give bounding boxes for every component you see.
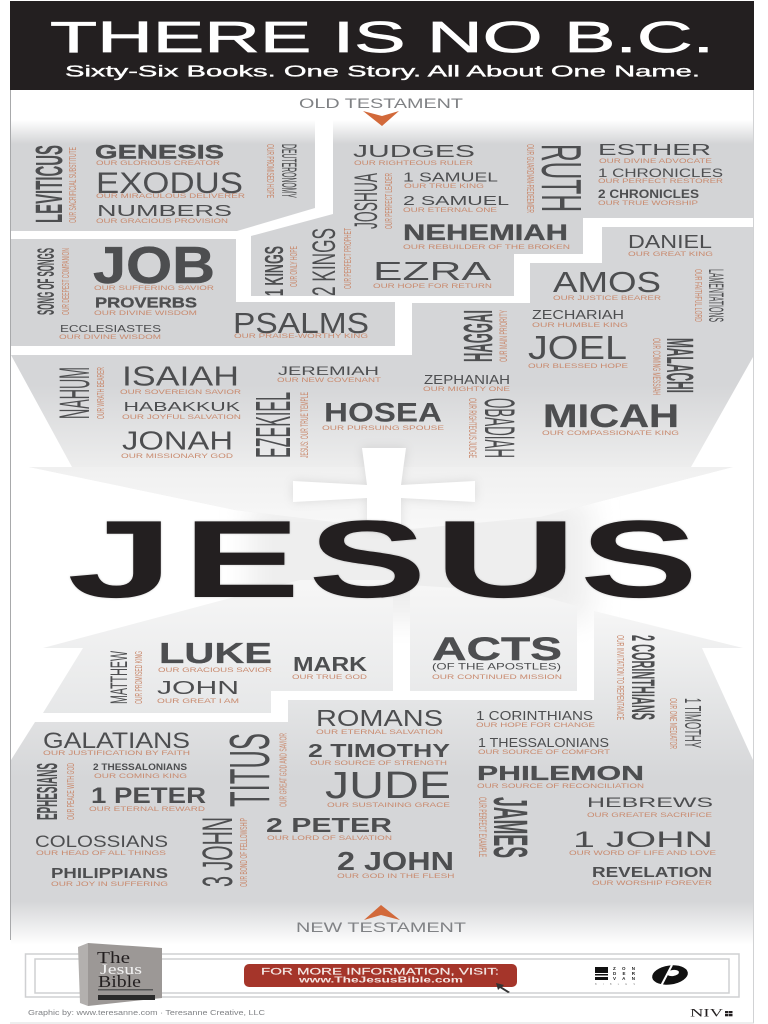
book: Revelation: REVELATION	[592, 864, 712, 881]
new testament books: epistles left: 3 JOHN	[194, 817, 242, 887]
old testament books: history: RUTH	[529, 144, 593, 212]
book: James	[476, 797, 536, 858]
book: Esther: OUR DIVINE ADVOCATE	[599, 158, 713, 165]
subtitle: Sixty-Six Books. One Story. All About One Name.	[65, 64, 700, 80]
text: LEVITICUS	[29, 145, 71, 223]
new testament books: epistles left: OUR BOND OF FELLOWSHIP	[238, 818, 250, 887]
old testament books: prophets: MALACHI	[658, 338, 700, 393]
book: Luke: LUKE	[159, 638, 272, 670]
call to action button: FOR MORE INFORMATION, VISIT:	[261, 966, 499, 978]
new testament books: epistles left: OUR GREAT GOD AND SAVIOR	[278, 733, 290, 807]
book: 2 Chronicles: OUR TRUE WORSHIP	[598, 200, 699, 207]
book: Lamentations	[692, 269, 728, 322]
book: Amos: AMOS	[553, 267, 661, 299]
old testament books: history: OUR PERFECT LEADER	[384, 173, 395, 229]
book: Proverbs	[94, 294, 197, 317]
book cover image: Jesus	[100, 962, 142, 978]
book: Genesis: GENESIS	[95, 142, 224, 164]
old testament books: history	[259, 141, 723, 296]
old testament books: history: JOSHUA	[348, 173, 384, 229]
book: 2 Chronicles	[598, 189, 699, 207]
new testament books: gospels and acts: MATTHEW	[106, 651, 133, 704]
book: Luke: OUR GRACIOUS SAVIOR	[158, 667, 272, 674]
book: Jonah	[121, 426, 233, 460]
old testament books: history: OUR PERFECT PROPHET	[342, 228, 354, 289]
book: Mark: OUR TRUE GOD	[292, 674, 367, 681]
book: Ezra: EZRA	[373, 256, 492, 286]
book: Philippians: OUR JOY IN SUFFERING	[51, 881, 168, 888]
book: 2 Peter	[266, 815, 393, 842]
book: 1 Samuel	[403, 170, 498, 190]
book: 1 Thessalonians: 1 THESSALONIANS	[478, 735, 609, 750]
book: Habakkuk: HABAKKUK	[124, 400, 241, 414]
book: Mark	[292, 654, 368, 681]
book: Jeremiah: OUR NEW COVENANT	[277, 377, 381, 384]
book: Philippians: PHILIPPIANS	[51, 866, 168, 882]
book: Numbers	[96, 203, 232, 225]
book: Ecclesiastes: ECCLESIASTES	[60, 323, 161, 335]
text: DEUTERONOMY	[277, 144, 301, 198]
central word JESUS: S	[580, 498, 698, 621]
book: John: OUR GREAT I AM	[157, 698, 239, 705]
central word JESUS: S	[308, 498, 426, 621]
book: Daniel	[628, 232, 713, 258]
book: 2 Corinthians	[614, 635, 661, 720]
old testament books: history: OUR ONLY HOPE	[289, 246, 300, 287]
book: Haggai	[455, 310, 510, 362]
book: Habakkuk	[122, 400, 241, 421]
central word JESUS: U	[434, 498, 578, 621]
book: Romans: ROMANS	[316, 705, 443, 731]
book: Isaiah	[120, 360, 241, 396]
book: 1 Corinthians: OUR HOPE FOR CHANGE	[476, 722, 596, 729]
book: Luke	[158, 638, 272, 674]
book: 2 Chronicles: 2 CHRONICLES	[598, 189, 699, 201]
book: Jude: OUR SUSTAINING GRACE	[327, 802, 451, 809]
book: 1 John: OUR WORD OF LIFE AND LOVE	[569, 850, 717, 857]
book: Exodus: EXODUS	[96, 167, 243, 200]
book: 1 Corinthians: 1 CORINTHIANS	[476, 708, 593, 723]
icon: up arrow	[364, 905, 400, 920]
book: Colossians: OUR HEAD OF ALL THINGS	[36, 850, 167, 857]
book: 1 Peter	[89, 783, 206, 813]
old testament books: prophets: OUR COMING MESSIAH	[650, 338, 662, 395]
book: Hebrews: HEBREWS	[587, 794, 713, 810]
book: 2 Kings	[306, 228, 354, 296]
book: Proverbs: OUR DIVINE WISDOM	[94, 310, 197, 317]
panel: wisdom books background	[11, 239, 395, 346]
book: Micah: OUR COMPASSIONATE KING	[542, 430, 679, 437]
central word JESUS	[67, 498, 698, 621]
book: 2 John: OUR GOD IN THE FLESH	[337, 873, 455, 880]
footer credit: Graphic by: www.teresanne.com · Teresanne Creative, LLC	[28, 1010, 265, 1017]
book: Hosea: OUR PURSUING SPOUSE	[322, 425, 445, 432]
logo: Zondervan	[595, 966, 636, 986]
central word JESUS: J	[67, 498, 174, 621]
book: Job: OUR SUFFERING SAVIOR	[94, 285, 214, 292]
book: Esther	[598, 142, 713, 165]
old testament books: prophets: HAGGAI	[455, 310, 501, 362]
book: Leviticus	[29, 145, 79, 223]
book: Genesis: OUR GLORIOUS CREATOR	[96, 160, 220, 167]
book: 2 Thessalonians: 2 THESSALONIANS	[93, 762, 187, 772]
logo: Zondervan: DER	[613, 971, 636, 976]
book: 1 Timothy	[667, 698, 706, 749]
book: Psalms: OUR PRAISE-WORTHY KING	[234, 333, 368, 340]
soft glow behind JESUS	[250, 500, 590, 620]
book: 1 Thessalonians: OUR SOURCE OF COMFORT	[478, 749, 610, 756]
book: Titus	[218, 733, 290, 807]
call to action button: www.TheJesusBible.com	[297, 974, 464, 984]
old testament books: prophets: OUR WRATH BEARER	[95, 367, 107, 419]
book: Isaiah: ISAIAH	[122, 360, 239, 392]
book: John	[157, 678, 239, 705]
old testament books: prophets: JESUS: OUR TRUE TEMPLE	[299, 392, 311, 458]
book: Joel: OUR BLESSED HOPE	[528, 363, 629, 370]
text: OUR RIGHTEOUS JUDGE	[466, 398, 478, 458]
book: Philippians	[51, 866, 168, 888]
book: Job: JOB	[93, 237, 215, 295]
book: Zechariah: ZECHARIAH	[532, 307, 624, 322]
book: Revelation	[592, 864, 712, 887]
old testament books: prophets	[51, 232, 728, 460]
icon: cursor	[496, 983, 510, 993]
panel: history and prophets background	[251, 91, 753, 296]
title: THERE IS NO B.C.	[50, 14, 714, 62]
book: Amos: OUR JUSTICE BEARER	[553, 295, 661, 302]
book: 2 John: 2 JOHN	[337, 846, 454, 876]
book: 3 John	[194, 817, 250, 887]
book: Matthew	[106, 651, 145, 704]
book: Zechariah	[532, 307, 628, 329]
book: Colossians	[35, 832, 168, 857]
book: Acts: (OF THE APOSTLES)	[432, 662, 561, 672]
book: Psalms: PSALMS	[233, 308, 369, 340]
book: Nehemiah: NEHEMIAH	[403, 220, 568, 245]
label: old testament	[299, 96, 463, 126]
old testament books: history: 1 KINGS	[259, 246, 289, 296]
new testament books: gospels and acts	[106, 631, 562, 705]
book: Numbers: NUMBERS	[97, 203, 232, 220]
book: Hebrews	[587, 794, 713, 819]
book: Micah: MICAH	[543, 398, 679, 434]
book: Zephaniah: ZEPHANIAH	[424, 372, 510, 387]
logo: NIV: NIV	[690, 1008, 724, 1020]
book: Philemon: PHILEMON	[477, 763, 644, 785]
book: 1 Corinthians	[476, 708, 596, 729]
book: John: JOHN	[157, 678, 239, 698]
book: 2 Timothy	[308, 741, 450, 767]
book: 1 John	[569, 827, 717, 857]
old testament books: prophets: LAMENTATIONS	[704, 269, 728, 322]
new testament books: epistles right: JAMES	[483, 797, 536, 858]
book: Joel: JOEL	[528, 329, 627, 366]
book: Ephesians: OUR PEACE WITH GOD	[66, 763, 77, 820]
label: old testament: OLD TESTAMENT	[299, 96, 463, 111]
new testament books: epistles left: EPHESIANS	[32, 763, 64, 820]
book: Obadiah	[466, 398, 523, 458]
book: Philemon	[477, 763, 644, 790]
old testament books: prophets: EZEKIEL	[247, 392, 301, 458]
book: Ezekiel	[247, 392, 311, 458]
panel: epistles background	[11, 611, 753, 945]
central word JESUS: E	[183, 498, 300, 621]
book: Ephesians	[32, 763, 77, 820]
book: Jeremiah: JEREMIAH	[278, 364, 379, 378]
logo: Zondervan: BIBLES	[595, 983, 635, 986]
text: SONG OF SONGS	[33, 248, 60, 315]
book: Mark: MARK	[293, 654, 368, 676]
old testament books: prophets: NAHUM	[51, 367, 99, 419]
new testament books: epistles left	[32, 705, 455, 888]
new testament books: epistles right: 2 CORINTHIANS	[625, 635, 661, 720]
cross	[293, 448, 475, 530]
logo: Zondervan: VAN	[613, 976, 635, 981]
book: Acts	[432, 631, 562, 681]
book: 1 Peter: OUR ETERNAL REWARD	[89, 806, 205, 813]
old testament books: law	[29, 142, 301, 225]
book: Ezra	[373, 256, 492, 290]
icon: down arrow	[363, 111, 399, 126]
book: 1 Thessalonians	[478, 735, 610, 756]
book: 1 Chronicles: OUR PERFECT RESTORER	[598, 178, 723, 185]
panel: gospels background	[43, 580, 393, 713]
book: Nehemiah	[403, 220, 570, 251]
book: 1 Samuel: 1 SAMUEL	[403, 170, 498, 184]
book: Nehemiah: OUR REBUILDER OF THE BROKEN	[403, 244, 570, 251]
book: 2 Peter: OUR LORD OF SALVATION	[267, 835, 392, 842]
book: 1 Chronicles	[598, 166, 723, 185]
book: Judges: OUR RIGHTEOUS RULER	[354, 160, 473, 167]
book: Jude: JUDE	[325, 765, 451, 807]
new testament books: epistles right: OUR ONE MEDIATOR	[667, 698, 679, 749]
old testament books: prophets: OUR MAIN PRIORITY	[498, 310, 510, 362]
book: Malachi	[650, 338, 700, 395]
book: 1 John: 1 JOHN	[573, 827, 713, 852]
book: Ruth	[524, 144, 593, 213]
old testament books: wisdom: OUR DEEPEST COMPANION	[61, 248, 72, 315]
book: 2 Timothy: OUR SOURCE OF STRENGTH	[310, 760, 447, 767]
new testament books: epistles right: OUR INVITATION TO REPENTANCE	[614, 635, 626, 720]
book: 1 Chronicles: 1 CHRONICLES	[598, 166, 723, 180]
old testament books: law: OUR PROMISED HOPE	[264, 144, 275, 198]
book: 1 Kings	[259, 246, 300, 296]
logo: Zondervan: ZON	[613, 966, 635, 971]
book: Hebrews: OUR GREATER SACRIFICE	[587, 812, 713, 819]
book: Daniel: OUR GREAT KING	[628, 251, 713, 258]
book: Ezra: OUR HOPE FOR RETURN	[373, 283, 492, 290]
logo: publisher mark	[651, 963, 689, 987]
book: Proverbs: PROVERBS	[95, 294, 197, 312]
book: Habakkuk: OUR JOYFUL SALVATION	[122, 414, 241, 421]
book: Judges	[353, 141, 475, 167]
book: Matthew: OUR PROMISED KING	[134, 651, 145, 704]
book: Hosea	[322, 398, 445, 432]
panel: acts background	[410, 585, 577, 691]
book: Ecclesiastes: OUR DIVINE WISDOM	[59, 334, 161, 341]
book: Revelation: OUR WORSHIP FOREVER	[592, 880, 712, 887]
book: Esther: ESTHER	[598, 142, 711, 159]
label: new testament	[296, 905, 466, 935]
book: Exodus: OUR MIRACULOUS DELIVERER	[96, 193, 245, 200]
new testament books: epistles right: 1 TIMOTHY	[680, 698, 706, 748]
book: 2 Timothy: 2 TIMOTHY	[308, 741, 450, 761]
book: Ecclesiastes	[59, 323, 161, 341]
new testament books: epistles right	[476, 635, 717, 887]
book: Romans	[316, 705, 443, 736]
new testament books: epistles left: TITUS	[218, 733, 282, 807]
book: 2 Thessalonians: OUR COMING KING	[94, 773, 187, 780]
book: Zephaniah	[423, 372, 511, 393]
book: Galatians: OUR JUSTIFICATION BY FAITH	[43, 750, 190, 757]
book: Deuteronomy	[264, 144, 301, 198]
book: 2 Samuel	[403, 193, 509, 214]
book: Ruth: OUR GUARDIAN-REDEEMER	[524, 144, 535, 213]
old testament books: wisdom	[33, 237, 369, 341]
book: Jeremiah	[277, 364, 381, 384]
book: Galatians: GALATIANS	[43, 728, 190, 753]
book: Nahum	[51, 367, 107, 419]
book: Joshua	[348, 173, 395, 229]
book: Jonah: JONAH	[122, 426, 233, 456]
book: Zechariah: OUR HUMBLE KING	[532, 322, 628, 329]
book: 2 Samuel: OUR ETERNAL ONE	[403, 207, 498, 214]
book cover image: Bible	[98, 972, 141, 991]
logo: NIV	[690, 1008, 732, 1020]
book: 2 Peter: 2 PETER	[266, 815, 393, 837]
panel: prophets background	[11, 227, 753, 530]
book: 2 Kings: 2 KINGS	[306, 228, 342, 296]
book cover image: The	[97, 948, 130, 967]
book: 1 Peter: 1 PETER	[91, 783, 206, 808]
header banner	[10, 1, 754, 90]
book: Philemon: OUR SOURCE OF RECONCILIATION	[477, 783, 644, 790]
call to action button	[244, 964, 517, 987]
panel: law books background	[11, 91, 315, 231]
book: Leviticus: OUR SACRIFICIAL SUBSTITUTE	[68, 147, 79, 223]
book: Jonah: OUR MISSIONARY GOD	[121, 453, 233, 460]
book: Lamentations: OUR FAITHFUL LORD	[692, 269, 703, 322]
book: Acts: OUR CONTINUED MISSION	[432, 674, 562, 681]
new testament books: epistles right: OUR PERFECT EXAMPLE	[476, 797, 488, 857]
book: Song of Songs	[33, 248, 72, 315]
light rays behind cross	[29, 467, 733, 530]
book: Romans: OUR ETERNAL SALVATION	[316, 729, 443, 736]
footer frame	[26, 954, 739, 997]
book: Zephaniah: OUR MIGHTY ONE	[423, 386, 511, 393]
book: Genesis	[95, 142, 224, 167]
book: Hosea: HOSEA	[324, 398, 442, 428]
book: Colossians: COLOSSIANS	[35, 832, 168, 851]
book: Daniel: DANIEL	[628, 232, 712, 252]
book: Numbers: OUR GRACIOUS PROVISION	[96, 218, 228, 225]
book: Acts: ACTS	[432, 631, 562, 667]
book: Isaiah: OUR SOVEREIGN SAVIOR	[120, 389, 241, 396]
text: OBADIAH	[475, 398, 523, 458]
book: 2 Samuel: 2 SAMUEL	[403, 193, 509, 208]
book: 2 Thessalonians	[93, 762, 187, 780]
label: new testament: NEW TESTAMENT	[296, 920, 466, 935]
book: Judges: JUDGES	[353, 141, 475, 161]
book: 1 Samuel: OUR TRUE KING	[404, 183, 484, 190]
book cover image	[78, 943, 162, 1006]
